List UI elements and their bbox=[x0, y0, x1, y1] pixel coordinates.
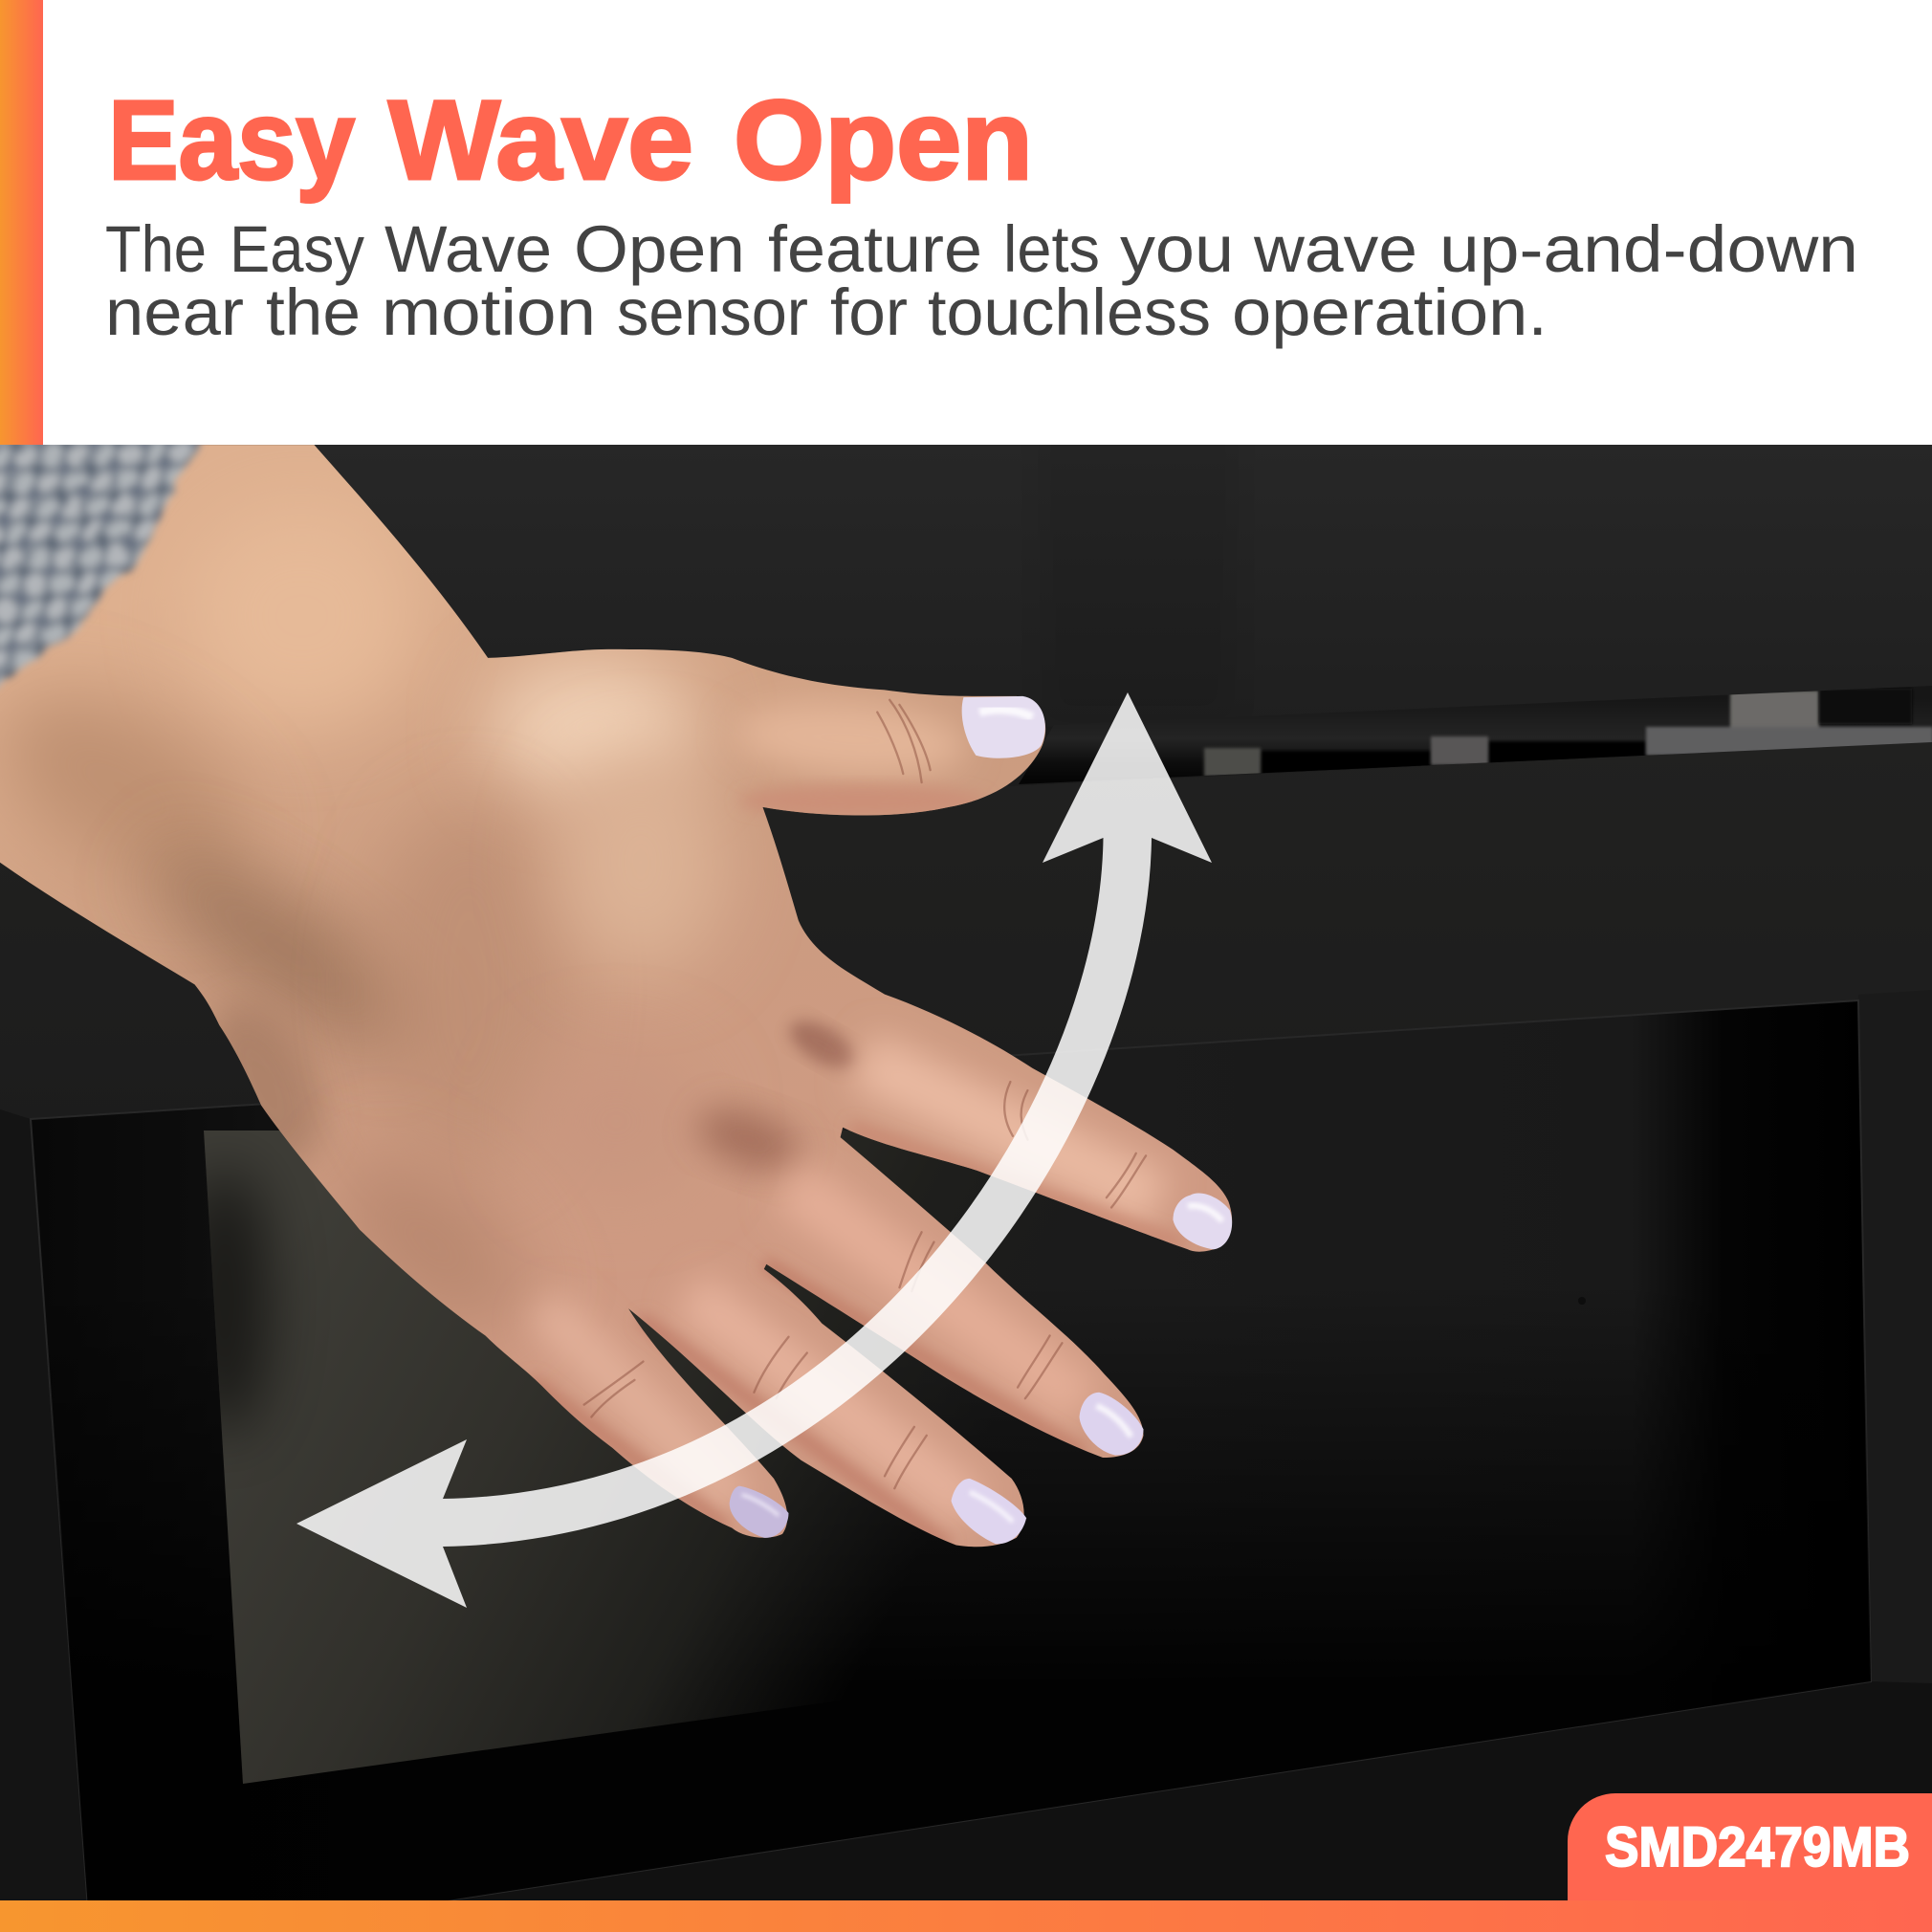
finger: middle bbox=[788, 1183, 1085, 1405]
text block: description: operation. bbox=[1232, 275, 1548, 349]
badge: model number: SMD2479MB bbox=[1605, 1816, 1910, 1878]
accent bar: bottom gradient bbox=[0, 1900, 1932, 1932]
text block: description: wave bbox=[1253, 212, 1417, 286]
text block: description: for bbox=[830, 275, 908, 349]
window: door glass bbox=[30, 999, 1872, 1900]
accent bar: left gradient bbox=[0, 0, 43, 445]
text block: description: Wave bbox=[384, 212, 552, 286]
text block: description: Easy bbox=[230, 212, 364, 286]
knuckle shading bbox=[785, 1016, 859, 1073]
text block: description: the bbox=[266, 275, 361, 349]
hand illustration bbox=[0, 419, 1232, 1547]
nail: thumb bbox=[962, 696, 1045, 758]
text block: description: touchless bbox=[928, 275, 1211, 349]
photo: microwave background bbox=[0, 421, 1932, 1932]
text block: description: The bbox=[105, 212, 207, 286]
arrow: curved double-headed wave arrow bbox=[296, 692, 1212, 1608]
panel: white header bbox=[0, 0, 1932, 445]
sleeve: grey knit cuff bbox=[0, 445, 205, 689]
text block: description: lets bbox=[1003, 212, 1100, 286]
finger: index bbox=[863, 1060, 1158, 1201]
nail: ring bbox=[952, 1479, 1026, 1544]
title: Open bbox=[734, 77, 1033, 204]
control strip: reflective band bbox=[1019, 686, 1932, 784]
text block: description: motion bbox=[382, 275, 596, 349]
nail: pinky bbox=[730, 1486, 788, 1538]
finger: pinky bbox=[542, 1306, 739, 1504]
text block: description: Open bbox=[574, 212, 745, 286]
title bbox=[108, 77, 1033, 204]
thumb bbox=[731, 694, 970, 784]
nail: index bbox=[1173, 1193, 1232, 1249]
text block: description: sensor bbox=[617, 275, 808, 349]
text block: description: feature bbox=[768, 212, 982, 286]
text block: description: near bbox=[105, 275, 244, 349]
creases: knuckle wrinkles bbox=[584, 700, 1146, 1488]
hand: skin bbox=[0, 445, 1232, 1547]
text block: description bbox=[105, 212, 1858, 349]
text block: description: up-and-down bbox=[1439, 212, 1858, 286]
title: Wave bbox=[388, 77, 693, 204]
text block: description: you bbox=[1120, 212, 1234, 286]
nail: middle bbox=[1080, 1393, 1144, 1456]
finger: ring bbox=[690, 1294, 974, 1509]
badge: model number bbox=[1568, 1793, 1932, 1900]
title: Easy bbox=[108, 77, 355, 204]
